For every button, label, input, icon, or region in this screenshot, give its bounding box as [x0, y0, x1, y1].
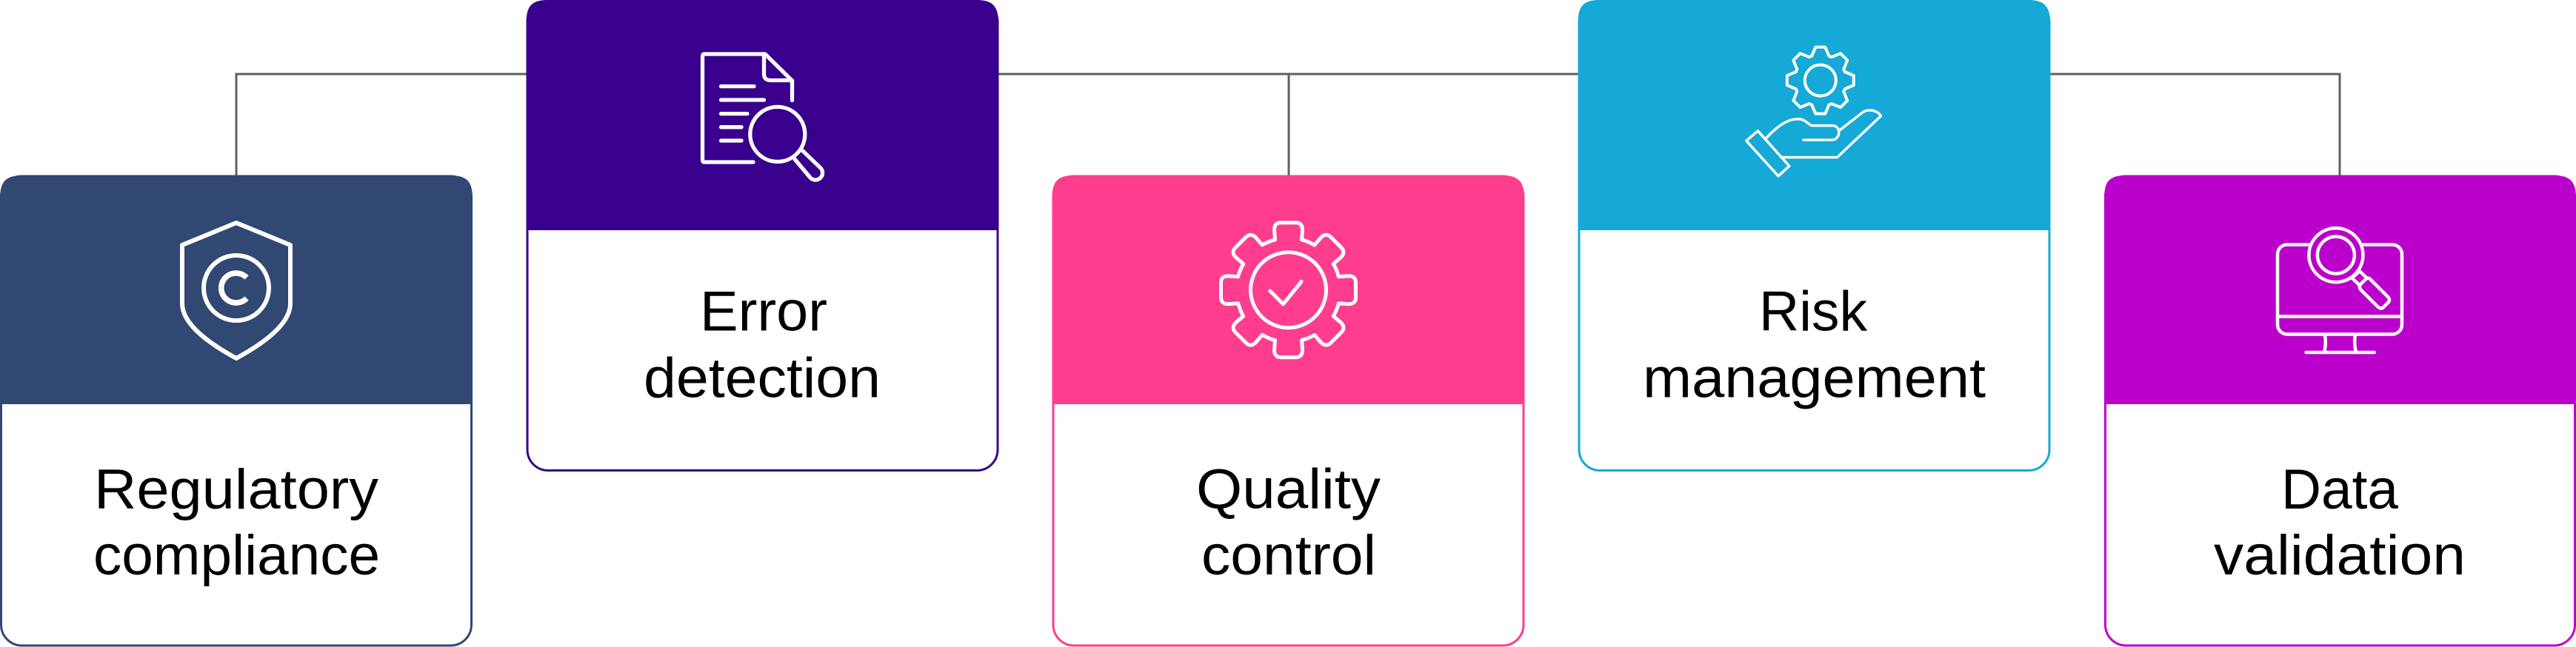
panel: error detection	[526, 0, 998, 471]
card header	[0, 175, 473, 404]
icon: hand holding gear	[1746, 47, 1881, 176]
card outline	[1, 176, 471, 646]
icon: shield with copyright symbol	[182, 223, 290, 358]
label: Quality control	[1196, 457, 1381, 587]
label: Risk management	[1643, 280, 1986, 410]
label: Data validation: Data	[2281, 458, 2399, 521]
label: Risk management: management	[1643, 346, 1986, 410]
label: Error detection: Error	[700, 280, 827, 343]
label: Error detection: detection	[644, 346, 881, 410]
label: Regulatory compliance: compliance	[93, 524, 380, 587]
card header	[1578, 0, 2050, 230]
card header	[526, 0, 998, 230]
label: Quality control: control	[1201, 524, 1376, 587]
label: Regulatory compliance	[93, 458, 380, 587]
icon: monitor with magnifier	[2278, 228, 2402, 352]
label: Regulatory compliance: Regulatory	[94, 458, 378, 521]
icon: gear with check mark	[1221, 223, 1355, 358]
connector lines	[236, 74, 2340, 178]
panel: quality control	[1052, 175, 1524, 646]
label: Error detection	[644, 280, 881, 410]
card header	[2104, 175, 2576, 404]
panel: data validation	[2104, 175, 2576, 646]
label: Quality control: Quality	[1196, 457, 1381, 521]
card outline	[1053, 176, 1524, 646]
icon: document with magnifier	[702, 54, 823, 180]
label: Data validation: validation	[2214, 524, 2466, 587]
card outline	[1579, 1, 2049, 471]
card outline	[527, 1, 998, 471]
card header	[1052, 175, 1524, 404]
label: Risk management: Risk	[1759, 280, 1868, 343]
panel: risk management	[1578, 0, 2050, 471]
label: Data validation	[2214, 458, 2466, 587]
panel: regulatory compliance	[0, 175, 473, 646]
card outline	[2105, 176, 2575, 646]
